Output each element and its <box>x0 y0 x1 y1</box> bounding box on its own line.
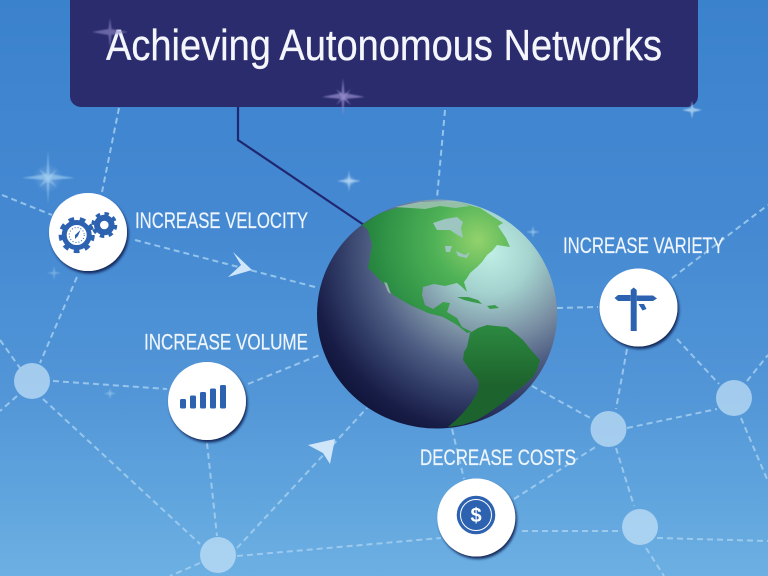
continent: South America <box>448 325 540 427</box>
globe <box>317 200 557 428</box>
network nodes <box>14 363 752 573</box>
connector line from banner to globe <box>238 107 364 225</box>
icon: volume bars <box>168 362 246 440</box>
arrow: upper <box>228 252 252 277</box>
label: increase volume: INCREASE VOLUME <box>144 330 308 354</box>
label: increase velocity: INCREASE VELOCITY <box>135 208 308 233</box>
islands: Caribbean <box>457 297 499 309</box>
continent: North America <box>362 201 510 333</box>
label: decrease costs: DECREASE COSTS <box>420 445 576 470</box>
icon: velocity gears <box>49 193 127 271</box>
label: increase variety: INCREASE VARIETY <box>563 233 724 258</box>
icon: variety signpost <box>600 268 678 346</box>
title: Achieving Autonomous Networks <box>106 21 662 70</box>
arrow: lower <box>308 439 335 464</box>
sparkle stars <box>22 18 702 399</box>
icon: costs dollar: $ <box>470 505 482 527</box>
title banner <box>70 0 698 107</box>
icon: costs dollar <box>437 478 515 556</box>
